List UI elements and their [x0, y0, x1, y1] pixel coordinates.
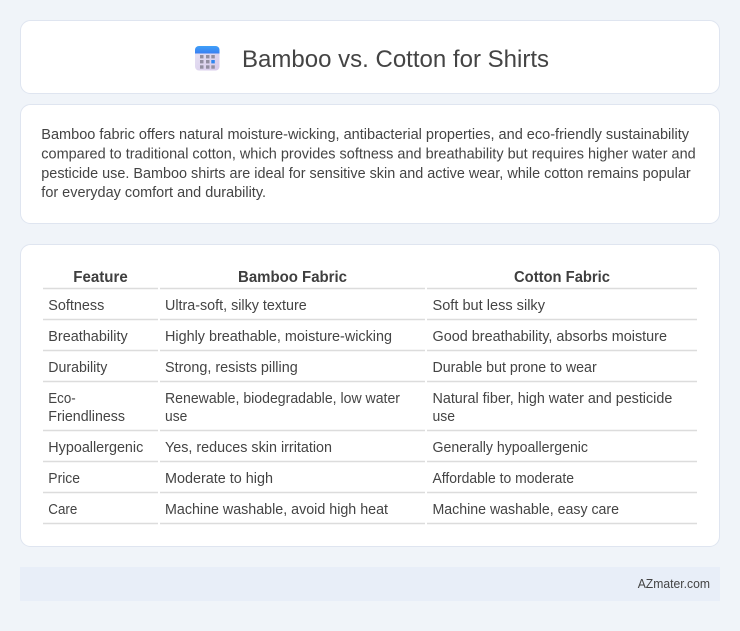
- row: softness: Soft but less silky: [432, 298, 546, 314]
- table header row: Cotton Fabric: [514, 269, 610, 286]
- row: softness: Softness: [48, 298, 104, 314]
- row: durability: Durable but prone to wear: [432, 360, 597, 376]
- row: softness: [48, 298, 546, 314]
- summary paragraph: Bamboo fabric offers natural moisture-wicking, antibacterial properties, and eco-friendly sustainability: [41, 127, 690, 143]
- title: Bamboo vs. Cotton for Shirts: [242, 46, 549, 73]
- row: eco-friendliness: use: [432, 409, 455, 425]
- row: hypoallergenic: Hypoallergenic: [48, 440, 143, 456]
- row: eco-friendliness: use: [165, 409, 187, 425]
- row: hypoallergenic: [48, 440, 588, 456]
- row: softness: Ultra-soft, silky texture: [165, 298, 307, 314]
- row: durability: [48, 360, 597, 376]
- panel: summary text: [20, 104, 720, 224]
- summary paragraph: compared to traditional cotton, which provides softness and breathability but requires higher water and: [41, 146, 696, 162]
- summary paragraph: [41, 127, 696, 201]
- table header row: Bamboo Fabric: [238, 269, 347, 286]
- summary paragraph: for everyday comfort and durability.: [41, 185, 266, 201]
- row: eco-friendliness: Natural fiber, high water and pesticide: [432, 391, 672, 407]
- table header row: Feature: [73, 269, 128, 286]
- row: care: Machine washable, easy care: [432, 502, 619, 518]
- row: price: Moderate to high: [165, 471, 273, 487]
- row: hypoallergenic: Yes, reduces skin irritation: [165, 440, 332, 456]
- row: eco-friendliness: Eco-: [48, 391, 76, 407]
- panel: title header: [20, 20, 720, 94]
- panel: comparison table: [20, 244, 720, 546]
- row: price: [48, 471, 574, 487]
- row: hypoallergenic: Generally hypoallergenic: [432, 440, 588, 456]
- row: eco-friendliness: Renewable, biodegradable, low water: [165, 391, 400, 407]
- row: care: Machine washable, avoid high heat: [165, 502, 388, 518]
- row: durability: Strong, resists pilling: [165, 360, 298, 376]
- icon: calendar: [195, 46, 220, 70]
- row: breathability: [48, 329, 667, 345]
- row: durability: Durability: [48, 360, 108, 376]
- row: care: [48, 502, 619, 518]
- row: care: Care: [48, 502, 77, 518]
- table header row: [73, 269, 610, 286]
- footer bar: [20, 567, 720, 601]
- row: price: Affordable to moderate: [432, 471, 574, 487]
- summary paragraph: pesticide use. Bamboo shirts are ideal for sensitive skin and active wear, while cotton remains popular: [41, 166, 691, 182]
- row: price: Price: [48, 471, 80, 487]
- row: breathability: Good breathability, absorbs moisture: [432, 329, 667, 345]
- row: breathability: Breathability: [48, 329, 128, 345]
- row: breathability: Highly breathable, moisture-wicking: [165, 329, 392, 345]
- row: eco-friendliness: [48, 391, 672, 425]
- footer credit: AZmater.com: [638, 576, 710, 591]
- row: eco-friendliness: Friendliness: [48, 409, 125, 425]
